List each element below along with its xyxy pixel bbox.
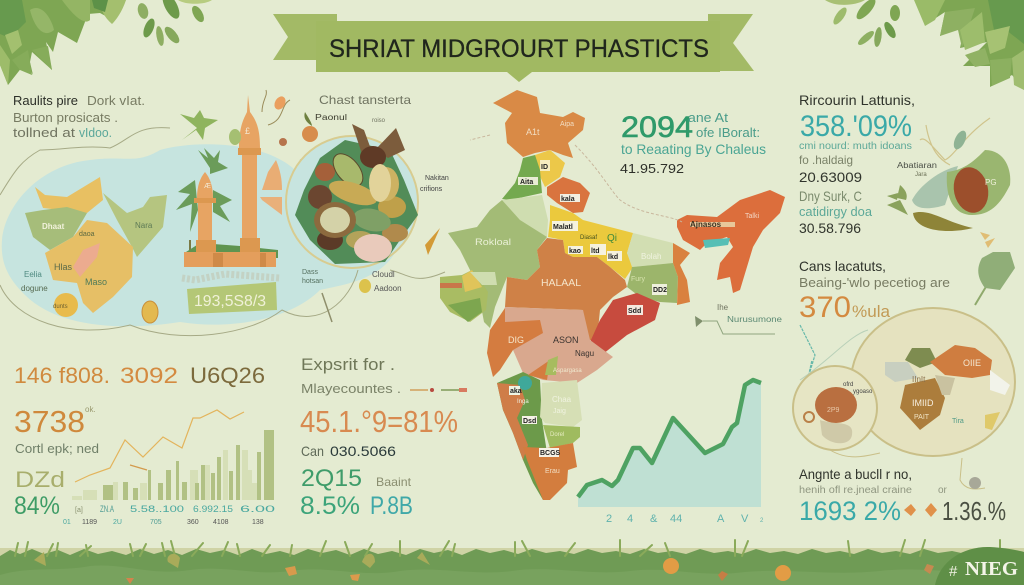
small lens map <box>804 382 873 443</box>
text block: right bottom <box>799 466 1006 526</box>
axis values: 4108 <box>213 519 229 526</box>
map labels: Nagu <box>575 349 594 358</box>
state: orange south <box>523 443 577 500</box>
text block: bottom left stats: U6Q26 <box>190 363 265 388</box>
state: karnataka <box>497 372 550 500</box>
small regional map: Dhaat <box>42 222 65 231</box>
callout pointer: Nurusumone <box>727 315 783 324</box>
map labels: BCGS <box>540 450 561 457</box>
text block: right bottom: henih ofl re.jneal craine <box>799 485 912 496</box>
map labels: Fury <box>631 276 646 283</box>
text block: right top stats: Dny Surk, C <box>799 188 862 204</box>
text block: top left intro: tollned at <box>13 125 75 140</box>
map labels <box>475 121 759 475</box>
food labels: Aadoon <box>374 284 402 293</box>
food labels: Dass <box>302 269 318 276</box>
green value plaque: 193,5S8/3 <box>194 293 266 310</box>
map labels: Jaig <box>553 408 566 415</box>
text block: right middle: 370 <box>799 291 851 324</box>
chart axis labels: 44 <box>670 513 682 525</box>
state: central orange <box>505 238 627 340</box>
callout pointer <box>695 303 783 334</box>
axis values: 6.00 <box>240 504 275 514</box>
text block: bottom middle stats <box>300 355 467 520</box>
text block: bottom left stats: ok. <box>85 405 96 414</box>
axis values: 360 <box>187 519 199 526</box>
text block: bottom left stats: DZd <box>15 467 65 492</box>
regional map pieces: IMIID <box>912 398 934 408</box>
text block: right top stats <box>799 92 915 236</box>
axis values: 2U <box>113 519 122 526</box>
text block: year stat: 41.95.792 <box>620 161 684 176</box>
map labels: Dorel <box>550 432 564 438</box>
icon: vine with fruits <box>229 90 318 146</box>
state: gujarat <box>440 270 497 322</box>
large circle <box>851 308 1015 456</box>
text block: bottom middle stats: Mlayecountes . <box>301 381 401 396</box>
chart axis labels: A <box>717 513 725 525</box>
text block: year stat <box>620 110 766 176</box>
axis values: 6.992.15 <box>193 504 233 514</box>
text block: bottom middle stats: 8.5% <box>300 492 360 520</box>
food labels: crifions <box>420 186 443 193</box>
state: northeast <box>677 190 785 293</box>
food labels: Nakitan <box>425 175 449 182</box>
text block: year stat: ofe IBoralt: <box>696 125 760 140</box>
text block: bottom left stats: 84% <box>14 492 60 520</box>
text block: right top stats: cmi nourd: muth idoans <box>799 141 912 152</box>
small lens map: ygoaso <box>853 389 873 395</box>
text block: bottom left stats: Cortl epk; ned <box>15 441 99 456</box>
text block: bottom middle stats: P.8B <box>370 492 413 520</box>
text block: bottom middle stats: 030.5066 <box>330 443 396 459</box>
text block: right middle: %ula <box>852 302 891 321</box>
icon: plant sprig <box>975 252 1015 305</box>
text block: right top stats: Rircourin Lattunis, <box>799 92 915 108</box>
text block: year stat: to Reaating By Chaleus <box>621 141 766 157</box>
text block: top left intro: Dork vIat. <box>87 93 145 108</box>
panel: lens circles with regional map <box>793 308 1015 489</box>
bar chart with trend line <box>63 410 275 526</box>
logo badge <box>935 547 1024 585</box>
chart axis labels <box>606 513 764 525</box>
text block: right bottom: Angnte a bucll r no, <box>799 466 912 482</box>
text block: bottom middle stats: Expsrit for . <box>301 355 395 374</box>
icon: fruit illustration <box>887 118 1010 248</box>
map labels: Aita <box>520 179 533 186</box>
axis values: 5.58..100 <box>130 504 184 514</box>
map labels: ASON <box>553 335 579 345</box>
map of India <box>440 90 785 500</box>
text block: bottom left stats <box>14 363 265 520</box>
lighter grass mounds <box>0 566 1024 585</box>
text block: bottom middle stats: 2Q15 <box>301 465 362 492</box>
map labels: Aipa <box>560 121 574 128</box>
state: green south <box>543 425 580 448</box>
map labels: Bolah <box>641 252 661 261</box>
text block: right top stats: fo .haldaig <box>799 153 853 167</box>
food circle illustration <box>286 124 418 268</box>
small regional map: Maso <box>85 277 107 287</box>
line chart with area <box>578 380 764 525</box>
regional map pieces: PAIT <box>914 414 930 421</box>
chart axis labels: & <box>650 513 658 525</box>
map labels: DIG <box>508 335 524 345</box>
state: bengal <box>673 243 690 305</box>
text block: bottom middle stats: Can <box>301 443 324 459</box>
text block: right top stats: 30.58.796 <box>799 220 861 236</box>
map labels: kala <box>561 196 575 203</box>
map labels: HALAAL <box>541 278 581 289</box>
small regional map: Nara <box>135 221 153 230</box>
map labels: Erau <box>545 468 560 475</box>
text block: right top stats: catidirgy doa <box>799 204 873 219</box>
text block: top left intro: Raulits pire <box>13 93 78 108</box>
regional map pieces: IInIt <box>912 375 926 384</box>
map labels: Inga <box>517 399 529 405</box>
map labels: ltd <box>591 248 600 255</box>
icon: scattered dotted pattern <box>182 274 280 280</box>
small regional map: daoa <box>79 231 95 238</box>
logo badge: NIEG <box>965 558 1018 580</box>
state: north <box>493 90 585 158</box>
icon: orange diamonds <box>904 503 937 517</box>
state: tamil pale <box>540 380 582 427</box>
text block: right middle: Beaing-'wlo pecetiog are <box>799 275 950 290</box>
text block: right top stats: 358.'09% <box>800 110 912 143</box>
state: uttarakhand <box>547 177 590 213</box>
axis values: 705 <box>150 519 162 526</box>
text block: right bottom: or <box>938 485 948 496</box>
state: yellow central north <box>548 205 633 279</box>
text block: right top stats: 20.63009 <box>799 169 862 185</box>
text block: bottom left stats: 146 f808. <box>14 363 110 388</box>
text block: bottom middle stats: 45.1.°9=81% <box>300 404 458 439</box>
text block: top left intro: Burton prosicats . <box>13 110 118 125</box>
text block: right middle: Cans lacatuts, <box>799 258 886 274</box>
map labels: A1t <box>526 127 540 137</box>
icon: temple towers <box>184 95 282 267</box>
state: odisha <box>590 293 660 354</box>
chart axis labels: 2 <box>606 513 612 525</box>
small lens map: 2P9 <box>827 407 840 414</box>
olive grass tufts <box>34 552 430 568</box>
icon: faint route lines <box>470 135 682 222</box>
regional map pieces: Tira <box>952 418 964 425</box>
axis values: 138 <box>252 519 264 526</box>
foliage: top right corner <box>825 0 1024 90</box>
flowers <box>126 558 934 584</box>
text block: top left intro <box>13 93 145 140</box>
map labels: Diasaf <box>580 235 597 241</box>
state: jharkhand <box>627 263 678 303</box>
food labels: roiso <box>372 118 386 124</box>
state: maharashtra <box>487 308 543 377</box>
state: bihar <box>627 233 673 267</box>
text block: bottom middle stats: Baaint <box>376 475 412 489</box>
map labels: Malatl <box>553 224 573 231</box>
grass blades <box>15 540 1000 556</box>
small circle <box>793 366 877 450</box>
axis values: 1189 <box>82 519 97 526</box>
green value plaque <box>187 282 277 314</box>
icon: fruit illustration: Jara <box>915 172 927 178</box>
chart axis labels: V <box>741 513 749 525</box>
map labels: Dsd <box>523 418 536 425</box>
regional map pieces: OIIE <box>963 358 981 368</box>
map labels: Aspargasa <box>553 368 582 374</box>
map labels: Ajnasos <box>690 220 722 229</box>
text block: bottom left stats: 3092 <box>120 363 178 388</box>
map labels: Qi <box>607 233 617 244</box>
chart axis labels: 4 <box>627 513 633 525</box>
panel: left blue blob with map, towers and food <box>0 90 445 336</box>
icon: palm trees <box>176 110 278 262</box>
small regional map: Hlas <box>54 262 73 272</box>
food labels: Chast tansterta <box>319 93 411 107</box>
regional map pieces <box>885 345 1010 430</box>
axis values: [a] <box>75 507 83 514</box>
callout pointer: Ihe <box>717 303 729 312</box>
grass strip <box>0 540 1024 585</box>
text block: year stat: ane At <box>688 110 728 125</box>
small regional map <box>21 177 167 323</box>
icon: temple towers: £ <box>245 126 250 136</box>
map labels: Talki <box>745 213 759 220</box>
small regional map: dogune <box>21 284 48 293</box>
foliage: top left corner <box>0 0 212 85</box>
map labels: Sdd <box>628 308 641 315</box>
state: himachal <box>535 150 565 187</box>
axis values: 01 <box>63 519 71 526</box>
icon: fruit illustration: PG <box>985 178 997 187</box>
text block: right bottom: 1.36.% <box>942 496 1006 526</box>
trend line <box>75 410 244 482</box>
food labels: hotsan <box>302 278 323 285</box>
logo badge: # <box>949 563 958 580</box>
small regional map: dunts <box>53 304 68 310</box>
food labels: Cloudl <box>372 270 395 279</box>
axis values <box>63 504 275 526</box>
text block: year stat: 2094 <box>621 111 693 144</box>
map labels: aka <box>510 388 522 395</box>
axis values: ZN.A <box>100 504 114 514</box>
state: deccan pink <box>498 307 613 383</box>
state: punjab <box>502 155 542 200</box>
text block: right bottom: 1693 2% <box>799 496 901 526</box>
map labels: ID <box>541 164 548 171</box>
text block: right middle <box>799 258 950 324</box>
map labels: lkd <box>608 254 618 261</box>
icon: temple towers: Æ <box>204 183 211 190</box>
small lens map: ofrd <box>843 382 853 388</box>
map labels: Chaa <box>552 395 572 404</box>
map labels: Rokloal <box>475 237 511 247</box>
state: pale north west <box>502 195 548 237</box>
text block: top left intro: vIdoo. <box>79 125 112 140</box>
title banner <box>273 14 754 82</box>
icon: fruit illustration: Abatiaran <box>897 161 937 170</box>
state: west green <box>448 200 547 328</box>
food labels: Paonul <box>315 113 347 122</box>
map labels: DD2 <box>653 287 667 294</box>
title text: SHRIAT MIDGROURT PHASTICTS <box>329 35 709 63</box>
small regional map: Eelia <box>24 270 42 279</box>
state: green strip <box>528 360 550 380</box>
food labels <box>302 93 449 322</box>
text block: bottom left stats: 3738 <box>14 404 85 439</box>
chart axis labels: 2 <box>760 518 764 524</box>
map labels: kao <box>569 248 581 255</box>
